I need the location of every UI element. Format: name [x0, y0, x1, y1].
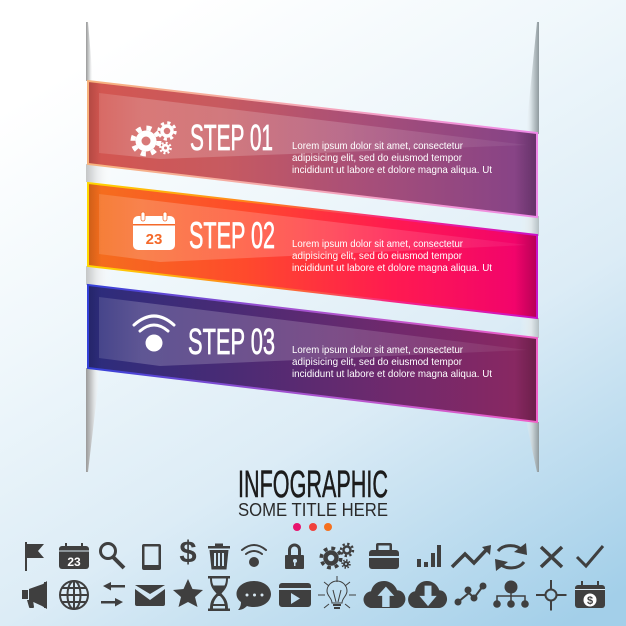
icon: tablet [142, 544, 161, 570]
icon: trend arrow [452, 545, 491, 567]
icon: calendar [133, 212, 175, 250]
band 1 edge shading [89, 82, 536, 216]
icon: crosshair [536, 580, 566, 610]
icon: hierarchy [493, 580, 529, 608]
icon: transfer arrows [101, 582, 125, 606]
icon: calendar: 23 [146, 231, 162, 248]
icon: speech bubble [236, 581, 271, 610]
icon: cross [541, 547, 562, 567]
text block: step 01: adipisicing elit, sed do eiusmod tempor [292, 153, 463, 164]
band 3 [88, 285, 537, 422]
band 3 gloss [99, 297, 527, 366]
band 3 edge shading [89, 286, 536, 421]
icon: gears [321, 544, 353, 568]
text block: step 03: adipisicing elit, sed do eiusmod tempor [292, 357, 463, 368]
icon: light bulb [318, 576, 356, 608]
text block: step 03 [292, 345, 492, 380]
band 2 gloss [99, 194, 527, 262]
text block: step 02 [292, 239, 492, 274]
icon: trash can [208, 544, 230, 570]
icon: star [173, 579, 203, 607]
icon: calendar dollar: $ [587, 595, 593, 607]
left side fold shadow [86, 22, 112, 472]
icon: check [577, 546, 603, 566]
text block: step 01 [292, 141, 492, 176]
icon: video window [279, 583, 311, 607]
band 2 [88, 183, 537, 318]
icon: wifi [242, 545, 266, 567]
band 2 edge shading [89, 184, 536, 317]
icon: dollar: $ [179, 534, 197, 569]
icon: briefcase [369, 543, 399, 569]
icon: envelope [135, 585, 165, 606]
icon: sync [495, 543, 527, 571]
icon: calendar 23: 23 [67, 555, 81, 569]
text block: step 02: incididunt ut labore et dolore magna aliqua. Ut [292, 263, 492, 274]
icon: globe [60, 581, 88, 609]
icon: magnifier [100, 544, 124, 568]
text block: step 01: Lorem ipsum dolor sit amet, consectetur [292, 141, 464, 152]
icon set [22, 534, 605, 611]
icon: cloud upload [364, 581, 405, 608]
title: INFOGRAPHIC [238, 464, 388, 506]
icon: wifi [134, 316, 174, 352]
text block: step 02: Lorem ipsum dolor sit amet, consectetur [292, 239, 464, 250]
text block: step 03: Lorem ipsum dolor sit amet, consectetur [292, 345, 464, 356]
icon: padlock [285, 544, 304, 569]
band 1 [88, 81, 537, 217]
right side fold shadow [520, 22, 539, 472]
text block: step 03: incididunt ut labore et dolore magna aliqua. Ut [292, 369, 492, 380]
panel: step 01 [88, 81, 537, 217]
icon: flag [25, 542, 44, 571]
icon: line nodes [454, 582, 486, 606]
icon: bar chart [417, 545, 441, 567]
icon: calendar dollar [575, 581, 605, 608]
icon: megaphone [22, 581, 47, 609]
text block: step 01: incididunt ut labore et dolore magna aliqua. Ut [292, 165, 492, 176]
heading: step 02: STEP 02 [189, 215, 275, 256]
panel: step 02 [88, 183, 537, 318]
heading: step 01: STEP 01 [190, 117, 273, 158]
icon: calendar 23 [59, 543, 89, 569]
heading: step 03: STEP 03 [188, 321, 275, 362]
decorative dots [293, 523, 332, 531]
subtitle: SOME TITLE HERE [238, 500, 388, 520]
band 1 gloss [99, 93, 527, 159]
text block: step 02: adipisicing elit, sed do eiusmod tempor [292, 251, 463, 262]
icon: hourglass [208, 576, 230, 611]
icon: gears [133, 123, 175, 154]
icon: cloud download [408, 581, 447, 608]
panel: step 03 [88, 285, 537, 422]
